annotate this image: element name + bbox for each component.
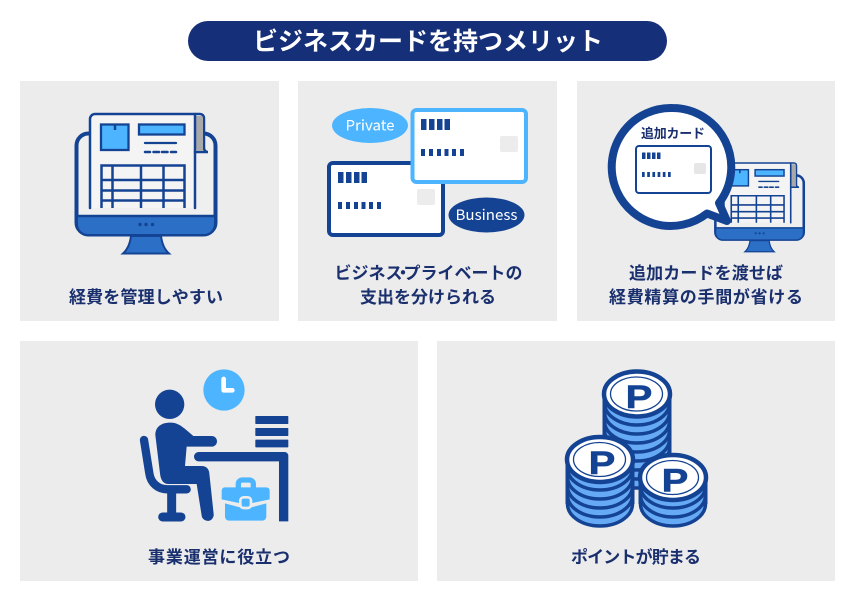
icon: documents stack — [255, 416, 288, 447]
badge: Private: Private — [346, 114, 394, 136]
icon: briefcase — [222, 480, 270, 521]
icon: small monitor with ledger — [715, 163, 804, 252]
label: business operations: 事業運営に役立つ — [148, 548, 290, 567]
title — [188, 21, 667, 61]
icon: person working at desk — [144, 369, 288, 521]
icon: left coin stack: P — [589, 445, 615, 481]
panel: points accumulate — [437, 341, 835, 581]
badge: Business — [448, 198, 524, 232]
panel: business operations — [20, 341, 418, 581]
icon: left coin stack — [566, 437, 634, 526]
icon: navy business card — [329, 163, 443, 235]
icon: clock — [203, 369, 245, 411]
label: second line: 支出を分けられる — [360, 287, 496, 307]
label: expense management: 経費を管理しやすい — [69, 287, 223, 307]
title: ビジネスカードを持つメリット — [253, 28, 603, 56]
icon: rear coin stack — [602, 372, 672, 488]
icon: person — [144, 390, 217, 521]
icon: desk — [194, 452, 288, 521]
icon: right coin stack — [638, 455, 708, 526]
badge: Private — [332, 108, 408, 143]
icon: right coin stack: P — [662, 462, 688, 499]
badge: Business: Business — [456, 204, 518, 225]
icon: coin stacks — [566, 372, 708, 526]
callout: speech bubble with additional card: 追加カード — [641, 126, 705, 141]
icon: light blue private card — [412, 110, 526, 182]
label: second line: 経費精算の手間が省ける — [609, 287, 803, 307]
icon: rear coin stack: P — [626, 379, 652, 415]
callout: speech bubble with additional card — [612, 108, 731, 226]
label: points accumulate: ポイントが貯まる — [571, 547, 701, 567]
label: additional card: 追加カードを渡せば — [629, 263, 783, 283]
icon: monitor with ledger — [76, 114, 216, 254]
label: separate private and business: ビジネス・プライベートの — [334, 263, 522, 283]
panel: additional card — [577, 81, 835, 321]
panel: expense management — [20, 81, 279, 321]
panel: separate private and business — [298, 81, 557, 321]
